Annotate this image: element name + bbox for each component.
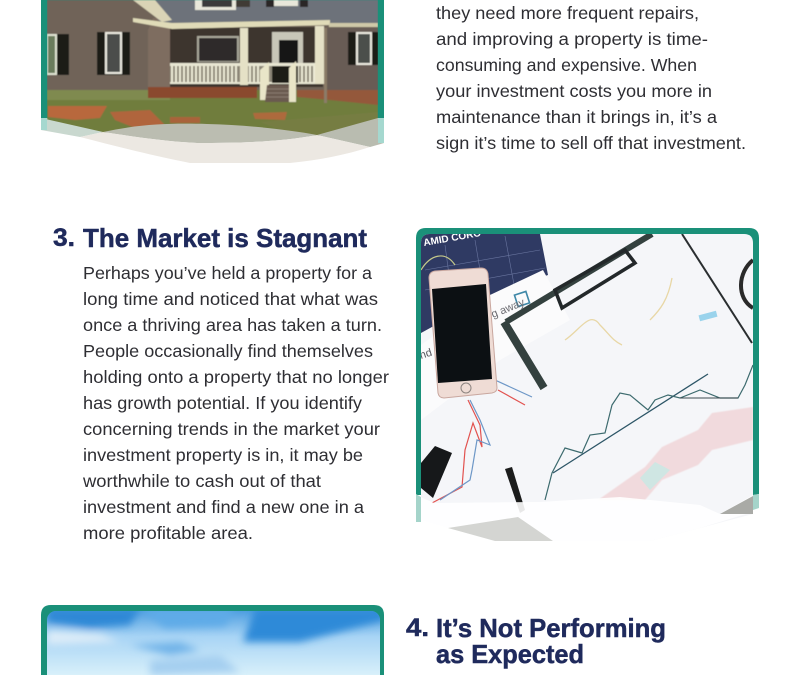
text block: section 3 body: holding onto a property that no longer <box>83 367 389 387</box>
text block: section 3 body: People occasionally find themselves <box>83 341 373 361</box>
text block: section 3 body <box>82 263 389 543</box>
text block: section 3 body: has growth potential. If you identify <box>83 393 362 413</box>
text block: section 2 continued: and improving a property is time- <box>436 29 708 49</box>
text block: section 2 continued: maintenance than it brings in, it’s a <box>436 107 717 127</box>
text block: section 3 body: Perhaps you’ve held a property for a <box>83 263 372 283</box>
dark paper <box>421 234 548 333</box>
text block: section 2 continued: consuming and expensive. When <box>436 55 697 75</box>
foundation <box>148 87 257 98</box>
phone <box>429 268 497 398</box>
dormers <box>195 0 236 10</box>
photo frame <box>416 228 759 495</box>
roof <box>156 0 378 23</box>
charts photo <box>418 228 753 544</box>
heading: It's Not Performing as Expected <box>436 613 666 669</box>
charts <box>565 278 672 345</box>
sky photo <box>47 608 385 675</box>
clipboard <box>506 234 652 322</box>
text block: section 3 body: long time and noticed that what was <box>83 289 378 309</box>
heading: section 4 number: 4. <box>406 614 429 642</box>
panel: house photo <box>41 0 384 165</box>
heading: It's Not Performing as Expected: as Expected <box>436 639 584 669</box>
panel: market charts photo <box>416 228 759 544</box>
walls <box>148 18 170 87</box>
porch railing <box>170 63 325 66</box>
text block: section 3 body: once a thriving area has taken a turn. <box>83 315 382 335</box>
panel: sky photo <box>41 605 385 675</box>
photo frame <box>41 0 384 118</box>
heading: It's Not Performing as Expected: It’s Not Performing <box>436 613 666 643</box>
text block: section 3 body: more profitable area. <box>83 523 253 543</box>
windows <box>97 32 130 75</box>
charts photo: nd s <box>418 344 442 362</box>
text block: section 3 body: investment property is in, it may be <box>83 445 363 465</box>
heading: section 3 number: 3. <box>53 224 75 252</box>
white paper <box>490 270 546 295</box>
red and blue lines <box>432 390 525 503</box>
heading: The Market is Stagnant: The Market is Stagnant <box>83 223 367 253</box>
charts photo: AMID CORO <box>423 228 482 249</box>
text block: section 3 body: investment and find a new one in a <box>83 497 364 517</box>
text block: section 2 continued: your investment costs you more in <box>436 81 712 101</box>
house photo <box>47 0 378 136</box>
lawn <box>47 90 378 132</box>
charts photo: g away <box>490 296 527 321</box>
text block: section 3 body: worthwhile to cash out of that <box>82 471 321 491</box>
text block: section 3 body: concerning trends in the market your <box>83 419 380 439</box>
dark object <box>421 446 452 498</box>
text block: section 2 continued: they need more frequent repairs, <box>436 3 699 23</box>
text block: section 2 continued <box>436 3 746 153</box>
photo frame <box>41 605 384 675</box>
columns <box>240 28 248 85</box>
wave overlay <box>416 494 759 541</box>
text block: section 2 continued: sign it’s time to sell off that investment. <box>436 133 746 153</box>
wave overlay <box>41 118 103 137</box>
